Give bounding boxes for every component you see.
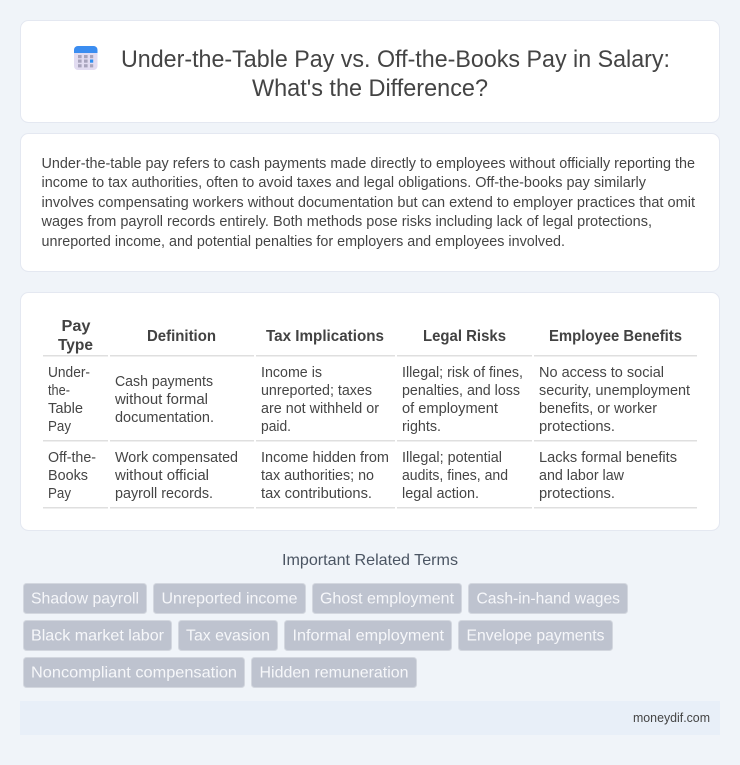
text block: introduction paragraph: income to tax authorities, often to avoid taxes and legal obligations. Off-the-books pay similarly [42, 175, 647, 191]
table row: off-the-books pay: audits, fines, and [402, 468, 508, 484]
table row: off-the-books pay: and labor law [539, 468, 625, 484]
table row: under-the-table pay: protections. [539, 419, 615, 435]
tag: black market labor [24, 620, 172, 650]
table row: under-the-table pay: Pay [48, 419, 72, 435]
table row: off-the-books pay: payroll records. [115, 486, 213, 502]
table row: off-the-books pay: Work compensated [115, 450, 238, 466]
table row: under-the-table pay: Table [48, 401, 83, 417]
heading: important related terms: Important Related Terms [282, 552, 458, 569]
table row: under-the-table pay: benefits, or worker [539, 401, 657, 417]
tag: noncompliant compensation [24, 658, 244, 688]
table row: under-the-table pay: of employment [402, 401, 498, 417]
table row: under-the-table pay [48, 365, 690, 435]
tag: informal employment: Informal employment [292, 628, 445, 644]
panel: introduction [20, 134, 720, 272]
table row: off-the-books pay: Books [48, 468, 88, 484]
table row: under-the-table pay: penalties, and loss [402, 383, 520, 399]
tag: cash-in-hand wages [468, 584, 628, 614]
table row: under-the-table pay: Income is [261, 365, 322, 381]
title [121, 46, 670, 102]
tag: tax evasion [178, 620, 278, 650]
table header row: Legal Risks [423, 328, 506, 345]
table header row: Employee Benefits [549, 328, 682, 345]
table row: off-the-books pay: Lacks formal benefits [539, 450, 677, 466]
panel: title card [20, 20, 720, 122]
related term tags [24, 584, 628, 688]
table row: under-the-table pay: Illegal; risk of fines, [402, 365, 523, 381]
tag: unreported income [154, 584, 306, 614]
table row: off-the-books pay [48, 450, 677, 502]
tag: noncompliant compensation: Noncompliant compensation [31, 664, 237, 682]
title: Under-the-Table Pay vs. Off-the-Books Pay in Salary: [121, 46, 670, 73]
tag: hidden remuneration [252, 658, 416, 688]
text block: introduction paragraph: unreported income, and potential penalties for employers and employees involved. [42, 234, 565, 250]
table row: off-the-books pay: without official [114, 468, 209, 484]
table row: off-the-books pay: tax authorities; no [261, 468, 374, 484]
tag: unreported income: Unreported income [162, 590, 298, 608]
panel: comparison table [20, 292, 720, 530]
tag: hidden remuneration: Hidden remuneration [260, 664, 408, 682]
text block: introduction paragraph: Under-the-table pay refers to cash payments made directly to employees without officially reporting the [42, 156, 695, 172]
tag: ghost employment: Ghost employment [320, 590, 455, 608]
table row: under-the-table pay: are not withheld or [261, 401, 379, 417]
table row: under-the-table pay: documentation. [115, 410, 214, 426]
table row: under-the-table pay: the- [48, 383, 70, 399]
footer bar [20, 701, 720, 735]
table header row: Pay [62, 318, 91, 335]
table row: off-the-books pay: tax contributions. [261, 486, 372, 502]
text block: introduction paragraph: involves compensating workers without documentation but can extend to employer practices that omit [42, 195, 695, 211]
table row: under-the-table pay: rights. [402, 419, 441, 435]
footer source text: moneydif.com [633, 711, 710, 725]
tag: envelope payments [458, 620, 612, 650]
tag: tax evasion: Tax evasion [186, 628, 270, 644]
icon: calendar [74, 46, 98, 70]
table row: off-the-books pay: Income hidden from [261, 450, 389, 466]
table header row [58, 318, 682, 354]
table header row: Tax Implications [266, 328, 384, 345]
table row: under-the-table pay: Cash payments [115, 374, 213, 390]
table row: off-the-books pay: Illegal; potential [402, 450, 502, 466]
table row: off-the-books pay: legal action. [402, 486, 479, 502]
tag: ghost employment [312, 584, 462, 614]
table header row: Type [58, 337, 93, 354]
tag: envelope payments: Envelope payments [466, 628, 604, 644]
tag: shadow payroll [24, 584, 146, 614]
table row: off-the-books pay: protections. [539, 486, 615, 502]
table row: under-the-table pay: security, unemployment [539, 383, 690, 399]
text block: introduction paragraph: wages from payroll records entirely. Both methods pose risks including lack of legal protections, [41, 214, 652, 230]
table row: off-the-books pay: Pay [48, 486, 72, 502]
tag: shadow payroll: Shadow payroll [31, 590, 139, 608]
tag: cash-in-hand wages: Cash-in-hand wages [476, 590, 620, 608]
table row: under-the-table pay: without formal [114, 392, 208, 408]
table row: under-the-table pay: paid. [261, 419, 291, 435]
table header row: Definition [147, 328, 216, 345]
text block: introduction paragraph [41, 156, 695, 250]
title: What's the Difference? [252, 75, 488, 102]
tag: black market labor: Black market labor [31, 628, 165, 644]
table row: under-the-table pay: Under- [48, 365, 90, 381]
tag: informal employment [284, 620, 452, 650]
table row: under-the-table pay: unreported; taxes [261, 383, 372, 399]
table row: off-the-books pay: Off-the- [48, 450, 96, 466]
table row: under-the-table pay: No access to social [539, 365, 664, 381]
